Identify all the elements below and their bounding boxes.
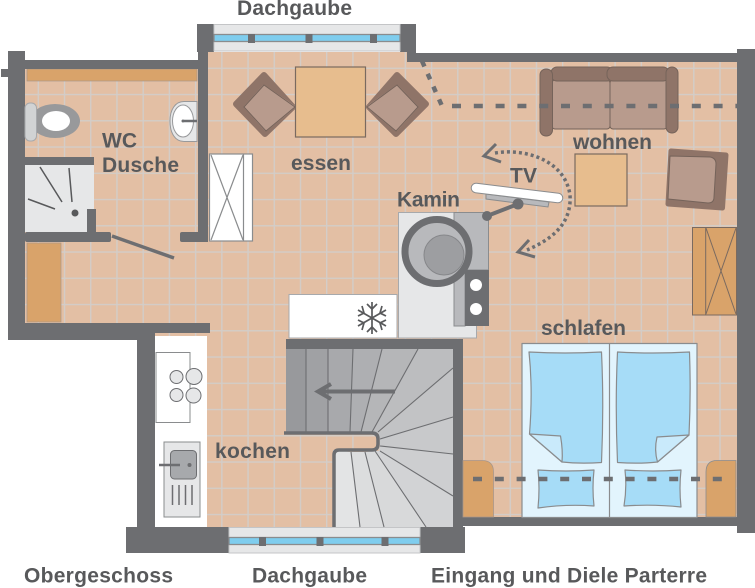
bed — [522, 344, 697, 518]
kitchen counter — [155, 336, 207, 527]
coffee table — [575, 154, 627, 206]
label: kochen: kochen — [215, 440, 290, 463]
tiled floor — [25, 52, 737, 527]
armchair — [668, 151, 726, 208]
icon: toilet — [25, 103, 80, 141]
chair right — [367, 75, 426, 134]
dashed dormer outline top — [422, 61, 737, 106]
sofa — [540, 67, 678, 136]
cupboard lower left — [27, 243, 61, 322]
label: essen: essen — [291, 152, 351, 175]
label: Kamin: Kamin — [397, 188, 460, 212]
wardrobe strip in WC — [27, 69, 197, 81]
door — [112, 236, 174, 258]
bedside table left — [463, 460, 494, 517]
bottom dormer window — [229, 528, 420, 553]
label: WC Dusche: Dusche — [102, 154, 179, 177]
label: schlafen: schlafen — [541, 317, 626, 340]
bedside table right — [706, 460, 736, 517]
label: WC Dusche: WC — [102, 130, 137, 152]
chair left — [236, 75, 295, 134]
top dormer window — [214, 24, 400, 51]
label: WC Dusche — [102, 130, 179, 177]
shower — [25, 165, 94, 232]
label: Eingang und Diele Parterre: Eingang und Diele Parterre — [431, 564, 707, 588]
cupboard on the right wall — [692, 228, 736, 315]
icon: wash basin — [170, 102, 197, 142]
fireplace platform — [398, 212, 489, 338]
TV on swivel arm — [476, 188, 558, 221]
label: Dachgaube bottom: Dachgaube — [252, 564, 367, 588]
label: TV: TV — [510, 164, 537, 188]
freezer — [289, 294, 397, 338]
wardrobe in dining area — [210, 154, 252, 241]
label: Obergeschoss: Obergeschoss — [24, 564, 173, 588]
staircase — [284, 349, 453, 527]
dashed dormer outline bottom — [473, 477, 724, 481]
arrow: TV swivel range — [484, 144, 570, 257]
label: wohnen: wohnen — [572, 131, 652, 154]
dining table — [296, 67, 366, 137]
icon: stove — [405, 220, 469, 284]
